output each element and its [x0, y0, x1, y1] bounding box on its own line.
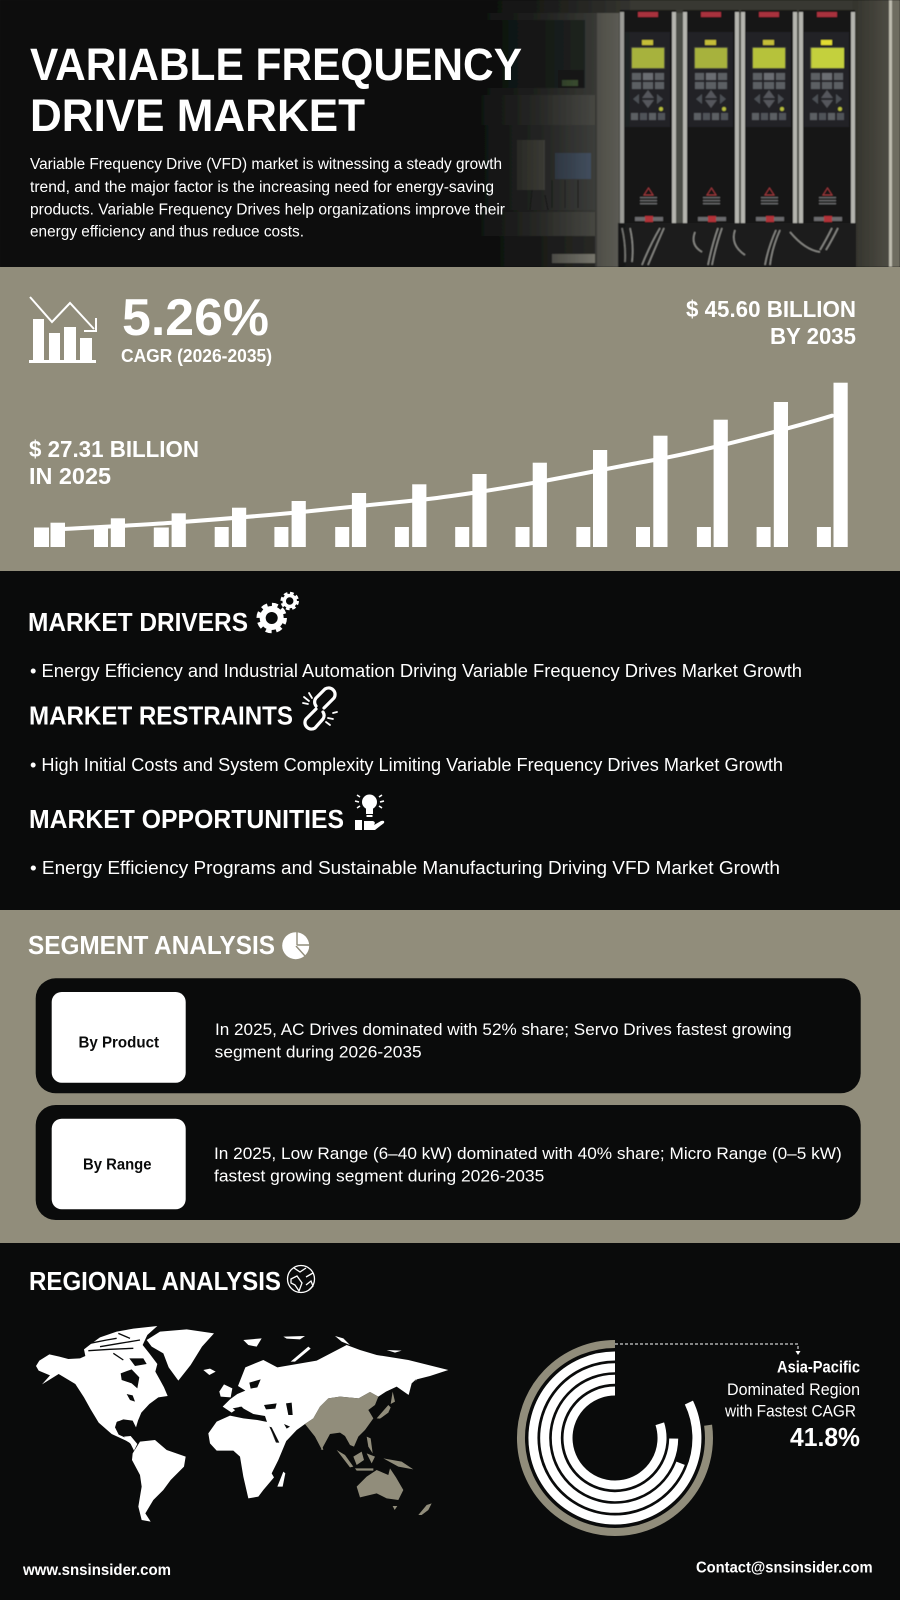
intro text — [30, 156, 505, 240]
callout: Asia-Pacific: 41.8% — [790, 1422, 860, 1452]
intro text: energy efficiency and thus reduce costs. — [30, 224, 304, 240]
card: by range: fastest growing segment during 2026-2035 — [214, 1167, 544, 1186]
icon: pie chart — [282, 932, 310, 959]
card: by range: By Range — [83, 1156, 152, 1173]
panel: segment analysis — [0, 910, 900, 1243]
heading: regional analysis: REGIONAL ANALYSIS — [29, 1266, 281, 1296]
restraint text: • High Initial Costs and System Complexity Limiting Variable Frequency Drives Market Growth — [30, 755, 783, 775]
panel: market drivers, restraints, opportunities — [0, 571, 900, 910]
callout: Asia-Pacific: Dominated Region — [727, 1380, 860, 1399]
card: by product: By Product — [78, 1034, 160, 1051]
intro text: Variable Frequency Drive (VFD) market is witnessing a steady growth — [30, 156, 502, 173]
photo: VFD drives in cabinet — [0, 0, 900, 267]
base value: $ 27.31 BILLION — [29, 436, 199, 462]
title: DRIVE MARKET — [30, 90, 365, 141]
callout: Asia-Pacific — [724, 1358, 860, 1452]
panel: header — [0, 0, 900, 267]
callout: Asia-Pacific: Asia-Pacific — [777, 1358, 860, 1377]
card: by range: In 2025, Low Range (6–40 kW) dominated with 40% share; Micro Range (0–5 kW) — [214, 1144, 842, 1163]
intro text: products. Variable Frequency Drives help organizations improve their — [30, 202, 505, 218]
panel: regional analysis — [0, 1243, 900, 1600]
panel: market size — [0, 267, 900, 571]
base value — [29, 436, 199, 489]
icon: globe — [288, 1266, 314, 1292]
icon: lightbulb in hand — [355, 794, 384, 830]
forecast value: $ 45.60 BILLION — [686, 296, 856, 322]
bar chart — [34, 383, 848, 547]
heading: market drivers: MARKET DRIVERS — [28, 607, 248, 637]
CAGR value: 5.26% — [122, 289, 269, 347]
opportunity text: • Energy Efficiency Programs and Sustainable Manufacturing Driving VFD Market Growth — [30, 858, 780, 878]
base value: IN 2025 — [29, 463, 111, 489]
forecast value — [686, 296, 856, 349]
CAGR value: CAGR (2026-2035) — [121, 346, 272, 366]
card: by product: segment during 2026-2035 — [215, 1043, 422, 1062]
footer: website: www.snsinsider.com — [22, 1562, 171, 1579]
card: by product: In 2025, AC Drives dominated with 52% share; Servo Drives fastest growing — [215, 1020, 792, 1039]
forecast value: BY 2035 — [770, 323, 856, 349]
card: by range — [36, 1105, 861, 1220]
heading: market restraints: MARKET RESTRAINTS — [29, 700, 293, 730]
heading: market opportunities: MARKET OPPORTUNITIES — [29, 804, 344, 834]
arrow: dashed connector — [615, 1344, 800, 1355]
footer: contact: Contact@snsinsider.com — [696, 1560, 873, 1577]
driver text: • Energy Efficiency and Industrial Automation Driving Variable Frequency Drives Market Growth — [30, 661, 802, 681]
icon: gears — [258, 593, 298, 632]
callout: Asia-Pacific: with Fastest CAGR — [724, 1402, 856, 1421]
card: by product — [36, 978, 861, 1093]
icon: broken chain — [303, 688, 337, 729]
intro text: trend, and the major factor is the increasing need for energy-saving — [30, 179, 494, 196]
title — [30, 39, 522, 141]
world map — [36, 1326, 448, 1522]
icon: chart with falling arrow — [29, 297, 96, 363]
radial bar chart — [521, 1344, 709, 1532]
heading: segment analysis: SEGMENT ANALYSIS — [28, 930, 275, 960]
title: VARIABLE FREQUENCY — [30, 39, 522, 90]
